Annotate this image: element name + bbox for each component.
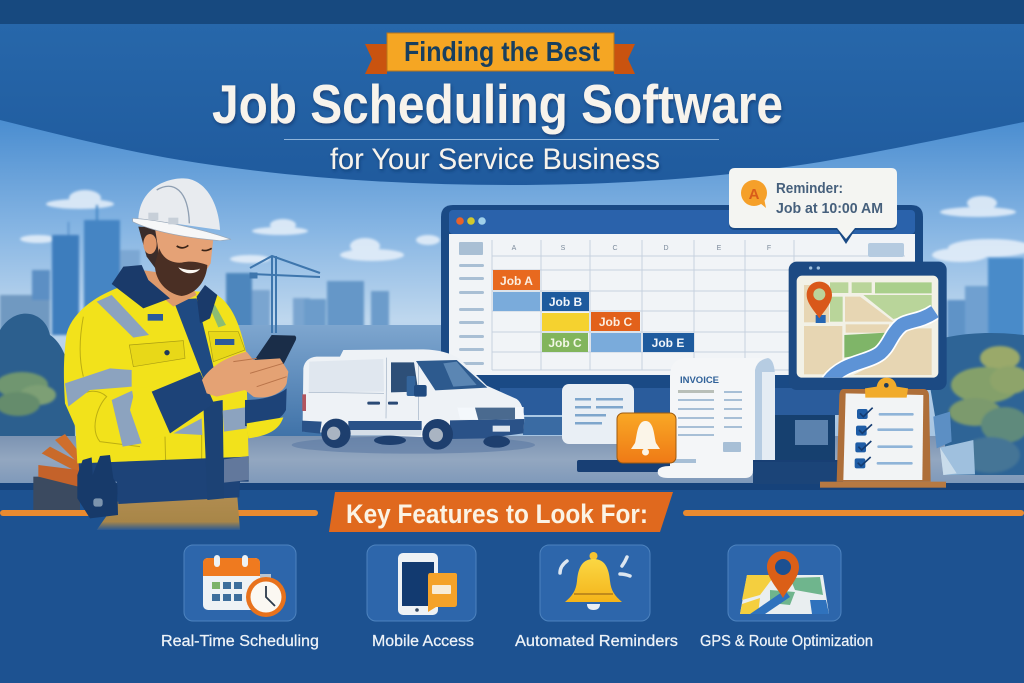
collar (112, 265, 170, 308)
clipboard checklist (820, 378, 946, 488)
feature: gps and route optimization (700, 545, 873, 650)
tool bag (33, 434, 82, 510)
feature: mobile access (367, 545, 476, 650)
hard hat (133, 178, 231, 241)
scene: right trees (923, 333, 1024, 475)
column headers: S (561, 245, 566, 252)
left sleeve yellow (132, 387, 167, 443)
reminder text: Reminder: (776, 181, 843, 197)
top dark strip (0, 0, 1024, 24)
yellow block (542, 313, 589, 331)
column headers: D (663, 245, 669, 252)
feature card 4 (728, 545, 841, 621)
inner shirt (173, 298, 215, 378)
orange divider left (0, 510, 318, 516)
feature: automated reminders (515, 545, 678, 650)
job A (493, 270, 540, 290)
pants (97, 497, 240, 530)
column headers: E (717, 245, 722, 252)
notification card (562, 384, 634, 444)
job A: Job A (500, 274, 533, 288)
zipper panel (203, 400, 224, 500)
top right grid widget (868, 243, 904, 257)
job B: Job B (549, 295, 582, 309)
header band (0, 0, 1024, 190)
key features banner (329, 492, 673, 532)
beard (155, 248, 207, 296)
monitor lower bezel (500, 388, 923, 415)
map tablet (789, 262, 947, 390)
right forearm (245, 388, 287, 426)
scene: left trees (0, 314, 75, 485)
finger lines (233, 358, 287, 387)
scene: clouds (20, 190, 1024, 263)
worker illustration (33, 178, 296, 530)
column headers: C (612, 245, 618, 252)
feature label 2: Mobile Access (372, 633, 474, 650)
invoice lines (672, 390, 742, 463)
ribbon tails (365, 44, 635, 74)
reminder callout (729, 168, 897, 244)
feature card 2 (367, 545, 476, 621)
monitor (441, 205, 923, 484)
monitor frame (441, 205, 923, 415)
feature label 1: Real-Time Scheduling (161, 633, 319, 650)
icon: map and pin (740, 551, 829, 614)
scene: sky background (0, 120, 1024, 483)
job C green: Job C (548, 336, 582, 350)
orange divider right (683, 510, 1024, 516)
key features text: Key Features to Look For: (346, 499, 648, 529)
smile (178, 267, 200, 273)
reminder icon: A (749, 186, 760, 203)
scene: construction crane (250, 256, 320, 333)
icon: calendar and clock (203, 555, 286, 617)
title underline (284, 139, 719, 140)
jacket pockets (129, 332, 245, 367)
folded paper box (933, 412, 975, 475)
neck (142, 270, 197, 307)
jacket reflective strips (65, 295, 247, 447)
reminder time: Job at 10:00 AM (776, 201, 883, 217)
light blue block 2 (591, 333, 641, 352)
invoice heading: INVOICE (680, 375, 719, 386)
scene: hazy city behind van (226, 325, 442, 437)
column headers (512, 245, 771, 252)
scene: left skyline (0, 205, 389, 373)
hands (202, 352, 288, 398)
window buttons (456, 217, 486, 225)
schedule sidebar (459, 242, 484, 365)
hair (138, 227, 173, 270)
icon: bell (560, 552, 630, 610)
column headers: F (767, 245, 771, 252)
jacket shading (68, 317, 202, 463)
job C green (542, 333, 588, 352)
scene: ground shadow (0, 483, 1024, 490)
feature label 3: Automated Reminders (515, 633, 678, 650)
van (292, 349, 535, 454)
job C orange: Job C (599, 315, 632, 329)
feature card 3 (540, 545, 650, 621)
job B (542, 292, 589, 311)
monitor stand (577, 410, 867, 484)
phone (253, 335, 296, 370)
left sleeve cuff (152, 372, 214, 433)
bell notification icon (617, 413, 676, 463)
eyes (177, 245, 212, 251)
belt pouch (77, 455, 118, 518)
right cuff yellow (247, 417, 283, 438)
job E (643, 333, 694, 352)
hem reflective (224, 456, 249, 483)
schedule grid (492, 240, 905, 370)
scene: right skyline (947, 258, 1024, 350)
screen (449, 234, 915, 375)
ear (143, 234, 157, 254)
title ribbon (365, 33, 635, 74)
feature: real-time scheduling (161, 545, 319, 650)
reminder icon (741, 180, 767, 208)
main title: Job Scheduling Software (212, 73, 783, 135)
job blocks (493, 270, 694, 352)
column headers: A (512, 245, 517, 252)
job E: Job E (652, 336, 684, 350)
scene: desk strip (523, 417, 603, 435)
empty light blue block (493, 292, 540, 311)
jacket hem (79, 457, 249, 504)
ribbon plate (387, 33, 614, 71)
invoice document (658, 358, 775, 478)
job C orange (591, 312, 640, 331)
scene: ground (0, 436, 1024, 483)
feature label 4: GPS & Route Optimization (700, 633, 873, 650)
jacket body (64, 286, 249, 463)
head (155, 228, 213, 293)
feature card 1 (184, 545, 296, 621)
ribbon text: Finding the Best (404, 36, 600, 67)
monitor title bar (449, 210, 915, 234)
subtitle: for Your Service Business (330, 143, 660, 176)
icon: phone and message (398, 553, 457, 615)
